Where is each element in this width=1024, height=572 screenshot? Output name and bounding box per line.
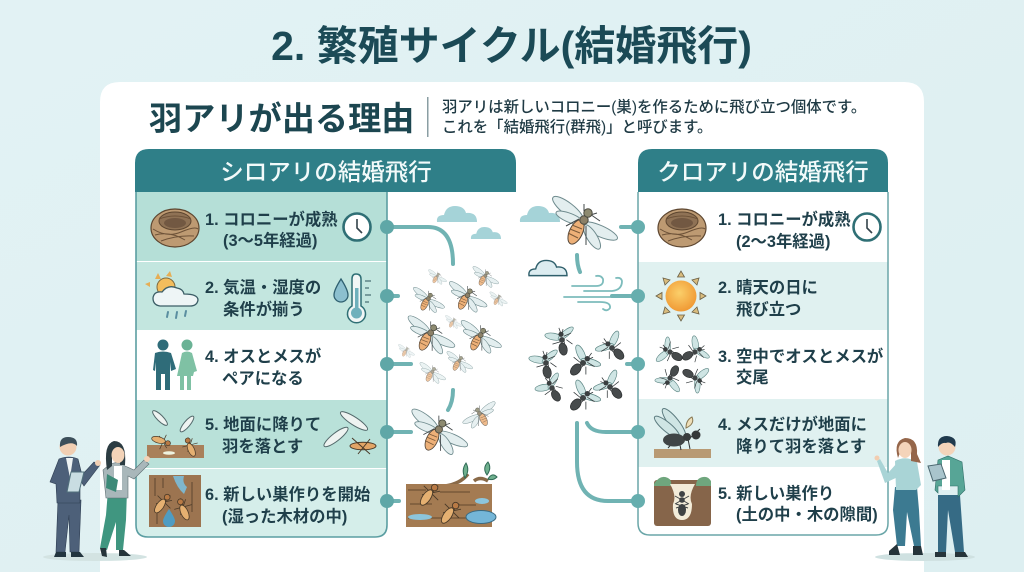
man presenter (50, 437, 101, 557)
termite step 2 (145, 271, 371, 323)
termite step 5: 5. 地面に降りて (205, 416, 321, 434)
ant step 3: 3. 空中でオスとメスが (718, 347, 883, 366)
termite step 1: (3〜5年経過) (223, 231, 317, 250)
termite step 5 (147, 409, 376, 459)
termite step 1: 1. コロニーが成熟 (205, 210, 338, 229)
panel: ant nuptial flight (631, 149, 888, 535)
ant step 3: 交尾 (736, 369, 769, 387)
termite rows (136, 192, 387, 537)
ant rows (638, 192, 888, 535)
ant step 1: 1. コロニーが成熟 (718, 210, 851, 229)
ant step 1 (658, 209, 880, 251)
ant step 4: 4. メスだけが地面に (718, 415, 867, 434)
people: left presenters (43, 437, 150, 561)
wind (564, 276, 624, 310)
ant step 2: 2. 晴天の日に (718, 278, 818, 297)
ant connectors (577, 227, 638, 501)
ant swarm (523, 315, 626, 412)
termite step 6: 6. 新しい巣作りを開始 (205, 485, 371, 504)
ant header (638, 149, 888, 192)
people: right presenters (874, 436, 975, 561)
ant step 1: (2〜3年経過) (736, 232, 830, 251)
subheading: 羽アリが出る理由 (149, 100, 414, 138)
illustration: log with termites (406, 462, 497, 527)
ant step 3 (650, 333, 883, 398)
clouds (437, 206, 560, 239)
intro text: 羽アリは新しいコロニー(巣)を作るために飛び立つ個体です。 (442, 98, 866, 116)
panel: termite nuptial flight (135, 149, 516, 537)
woman presenter (874, 438, 923, 555)
title: 2. 繁殖サイクル(結婚飛行) (271, 23, 752, 69)
termite swarm (398, 265, 508, 457)
termite step 2: 条件が揃う (223, 300, 305, 319)
outlined cloud (529, 260, 567, 276)
termite step 4 (153, 340, 321, 390)
ant step 4 (652, 406, 867, 458)
white content panel (100, 82, 924, 572)
termite step 6 (149, 475, 371, 527)
termite header text: シロアリの結婚飛行 (220, 159, 432, 185)
termite step 6: (湿った木材の中) (222, 507, 347, 526)
dots over border (631, 220, 645, 508)
woman presenter (100, 441, 150, 557)
ant step 5: (土の中・木の隙間) (736, 506, 878, 524)
ant step 5: 5. 新しい巣作り (718, 484, 834, 503)
termite step 4: 4. オスとメスが (205, 347, 321, 366)
ant step 5 (654, 477, 878, 526)
ant step 4: 降りて羽を落とす (736, 438, 866, 456)
intro text: これを「結婚飛行(群飛)」と呼びます。 (442, 118, 712, 136)
ant header text: クロアリの結婚飛行 (657, 159, 869, 185)
intro text (442, 98, 866, 136)
ant step 2: 飛び立つ (736, 301, 801, 319)
termite step 5: 羽を落とす (222, 438, 303, 456)
termite step 2: 2. 気温・湿度の (205, 278, 321, 297)
termite connectors (380, 220, 453, 508)
man presenter (928, 436, 968, 557)
termite header (135, 149, 516, 192)
large winged ant (549, 193, 620, 252)
termite step 4: ペアになる (222, 370, 304, 388)
ant step 2 (656, 271, 818, 321)
termite step 1 (151, 209, 370, 250)
